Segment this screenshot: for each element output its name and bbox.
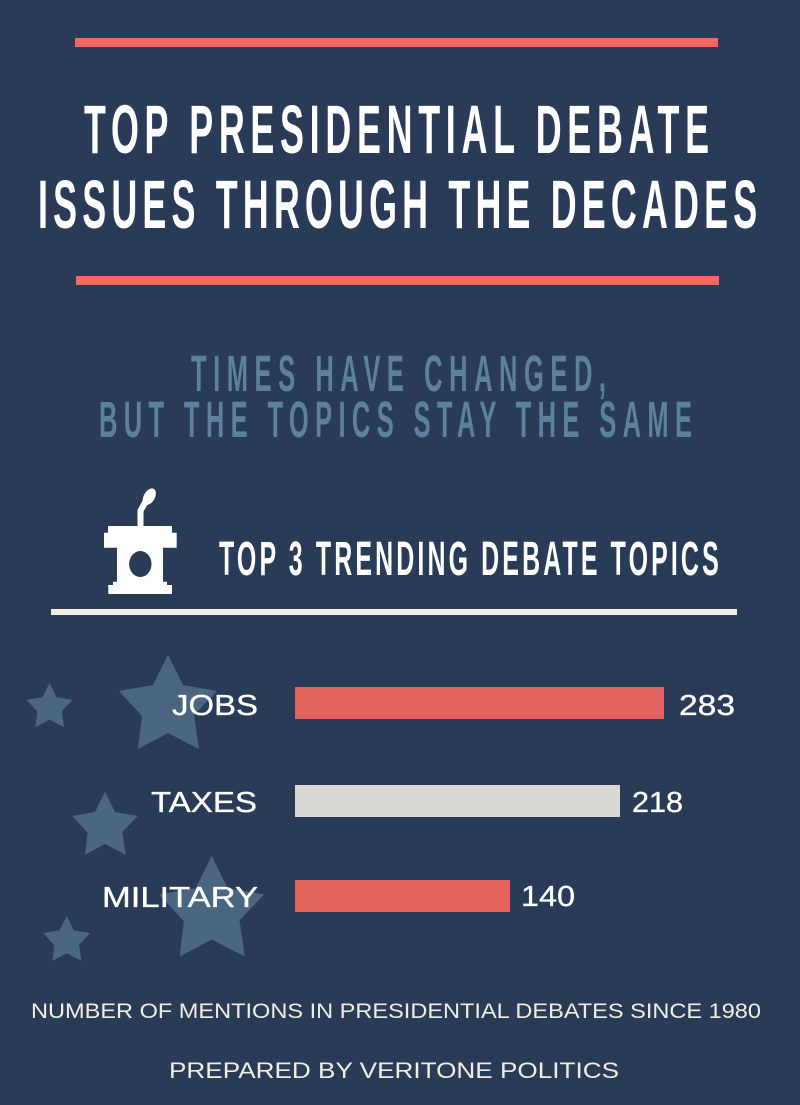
credit: PREPARED BY VERITONE POLITICS	[169, 1058, 619, 1083]
row: military: 140	[521, 881, 575, 913]
title	[38, 90, 757, 243]
row: military: MILITARY	[102, 882, 258, 914]
subtitle	[99, 345, 692, 448]
top rule	[75, 38, 718, 47]
heading: top 3 trending debate topics: TOP 3 TRENDING DEBATE TOPICS	[219, 532, 719, 586]
row: jobs: 283	[679, 690, 735, 722]
row: jobs	[172, 687, 735, 722]
heading underline	[51, 609, 737, 615]
title: ISSUES THROUGH THE DECADES	[38, 165, 757, 243]
subtitle: BUT THE TOPICS STAY THE SAME	[99, 391, 692, 448]
row: taxes: TAXES	[151, 787, 257, 819]
chart caption: NUMBER OF MENTIONS IN PRESIDENTIAL DEBATES SINCE 1980	[31, 1000, 761, 1023]
bottom title rule	[76, 276, 719, 285]
row: taxes	[151, 785, 683, 819]
title: TOP PRESIDENTIAL DEBATE	[84, 90, 709, 168]
decorative stars	[26, 655, 264, 961]
row: military	[102, 880, 575, 914]
icon: podium with microphone	[104, 486, 177, 594]
row: jobs: JOBS	[172, 690, 258, 722]
bar chart	[102, 687, 735, 914]
row: taxes: 218	[632, 787, 683, 819]
subtitle: TIMES HAVE CHANGED,	[191, 345, 606, 402]
